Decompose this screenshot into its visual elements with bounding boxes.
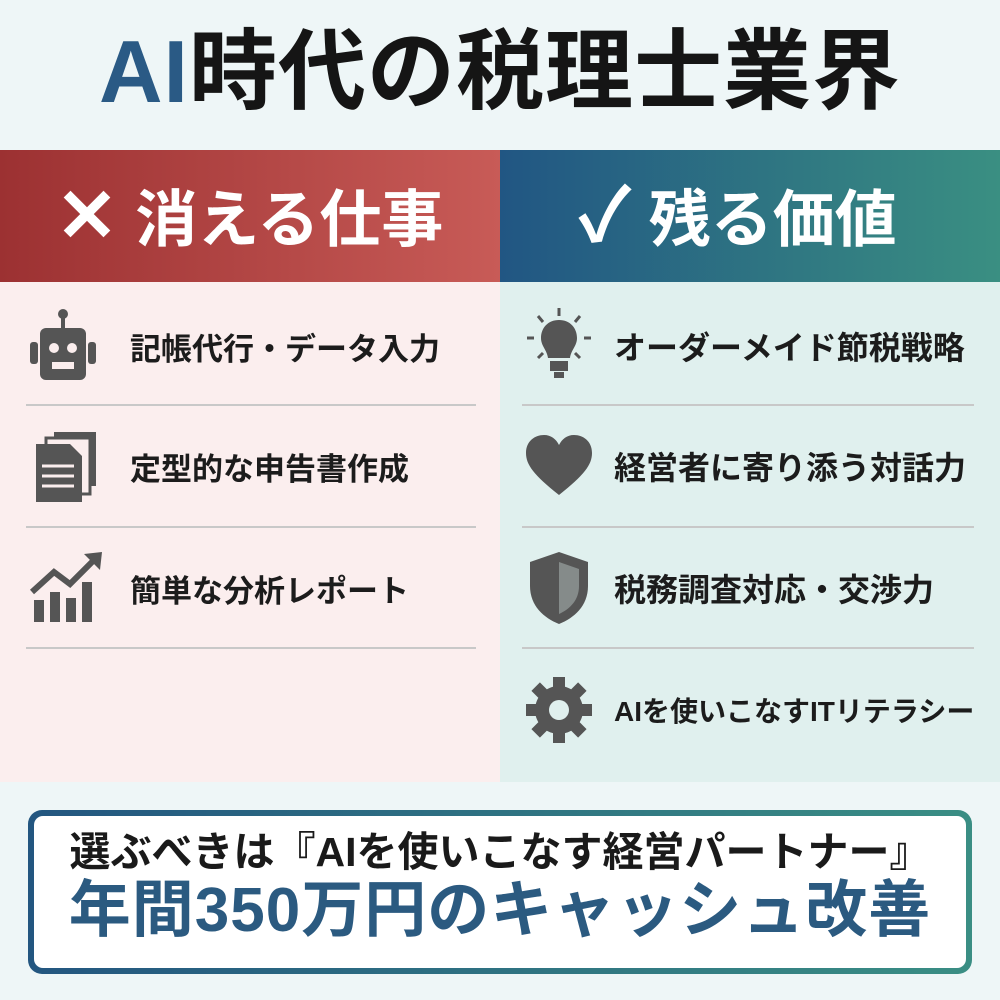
icon: documents — [36, 432, 96, 502]
header: 消える仕事 — [0, 150, 500, 282]
callout box — [28, 810, 972, 974]
icon: shield — [530, 552, 588, 624]
panel: disappearing jobs — [0, 150, 500, 782]
item: 分析レポート — [30, 552, 409, 622]
callout line 1: 選ぶべきは『AIを使いこなす経営パートナー』 — [70, 829, 930, 875]
item: 節税戦略 — [527, 308, 965, 378]
item: 節税戦略: オーダーメイド節税戦略 — [614, 330, 965, 366]
panel: remaining value — [500, 150, 1000, 782]
item: 申告書作成 — [36, 432, 409, 502]
title: AI時代の税理士業界 — [99, 22, 901, 121]
item: 対話力: 経営者に寄り添う対話力 — [614, 450, 966, 486]
icon: gear — [526, 677, 592, 743]
item: 税務調査: 税務調査対応・交渉力 — [614, 572, 934, 608]
item: ITリテラシー — [526, 677, 974, 743]
icon: robot — [30, 309, 96, 380]
header: 残る価値 — [500, 150, 1000, 282]
callout line 2: 年間350万円のキャッシュ改善 — [69, 876, 931, 945]
header: 消える仕事: ✕ 消える仕事 — [56, 174, 443, 257]
item: 記帳代行: 記帳代行・データ入力 — [130, 332, 440, 366]
item: 記帳代行 — [30, 309, 440, 380]
icon: heart — [526, 435, 592, 495]
item: 対話力 — [526, 435, 966, 495]
icon: chart — [30, 552, 102, 622]
header: 残る価値: ✓ 残る価値 — [578, 174, 897, 257]
item: ITリテラシー: AIを使いこなすITリテラシー — [614, 696, 974, 727]
item: 申告書作成: 定型的な申告書作成 — [130, 452, 409, 486]
item: 税務調査 — [530, 552, 934, 624]
item: 分析レポート: 簡単な分析レポート — [130, 574, 409, 608]
icon: bulb — [527, 308, 591, 378]
